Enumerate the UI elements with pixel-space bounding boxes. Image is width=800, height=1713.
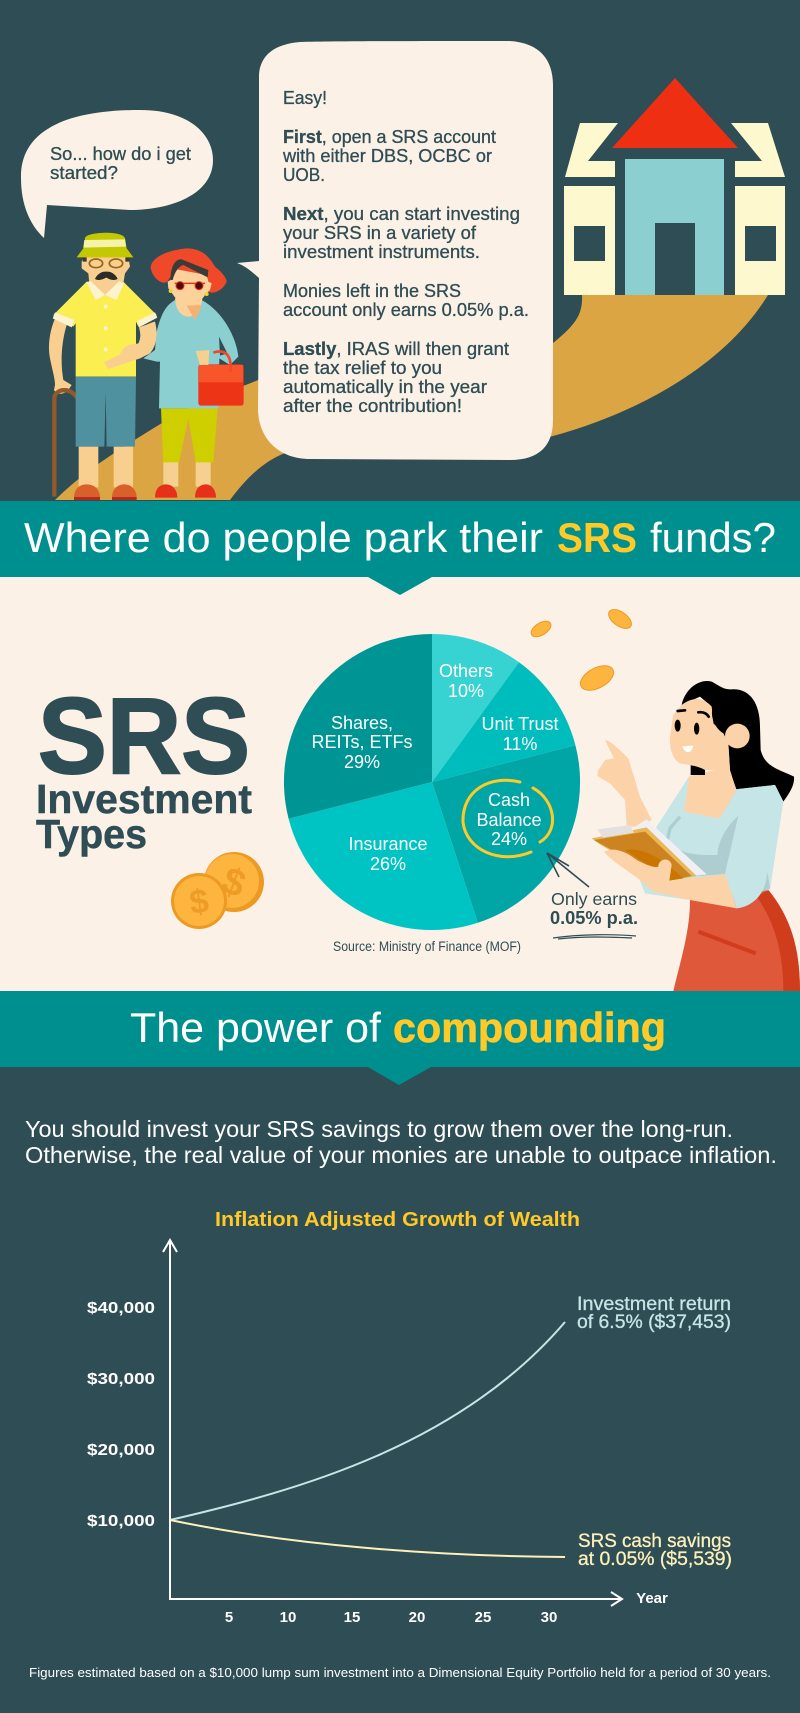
x axis labels: 20	[409, 1609, 425, 1626]
y axis labels	[87, 1300, 155, 1530]
answer text	[282, 87, 529, 416]
speech bubble: answer	[237, 41, 553, 460]
pie labels: 10%	[448, 681, 484, 701]
pie labels: Unit Trust	[481, 714, 559, 734]
callout: only earns: 0.05% p.a.	[550, 908, 638, 928]
illustration: elderly man	[49, 233, 157, 500]
axes	[163, 1240, 622, 1606]
y axis labels: $30,000	[87, 1371, 155, 1388]
answer text: Easy!	[283, 87, 327, 108]
pie labels: 26%	[370, 854, 406, 874]
intro text	[25, 1116, 777, 1168]
y axis labels: $10,000	[87, 1513, 155, 1530]
callout: only earns	[547, 853, 638, 939]
line chart: inflation adjusted growth of wealth	[87, 1209, 732, 1626]
chart title: Inflation Adjusted Growth of Wealth	[215, 1209, 580, 1231]
pie labels	[311, 661, 559, 874]
pie labels: 24%	[491, 829, 527, 849]
pie labels: 11%	[503, 734, 537, 754]
banner heading: Where do people park their	[24, 514, 543, 561]
pie labels: Insurance	[348, 834, 428, 854]
intro text: Otherwise, the real value of your monies are unable to outpace inflation.	[25, 1142, 777, 1168]
panel: power of compounding banner	[0, 991, 800, 1085]
pie labels: REITs, ETFs	[311, 732, 413, 752]
investment return label: of 6.5% ($37,453)	[577, 1312, 731, 1333]
y axis labels: $40,000	[87, 1300, 155, 1317]
title block	[36, 675, 252, 857]
cash savings label	[578, 1531, 732, 1570]
illustration: woman with book	[592, 681, 800, 991]
banner heading: The power of	[130, 1004, 381, 1051]
answer text: with either DBS, OCBC or	[282, 145, 492, 166]
answer text: Next, you can start investing	[283, 203, 520, 224]
banner band	[0, 991, 800, 1085]
x axis labels: 10	[280, 1609, 296, 1626]
pie labels: Shares,	[331, 713, 393, 733]
banner heading: funds?	[650, 514, 776, 561]
cream background	[0, 577, 800, 991]
x axis labels: 25	[475, 1609, 491, 1626]
answer text: Monies left in the SRS	[283, 280, 461, 301]
cash savings label: SRS cash savings	[578, 1531, 731, 1552]
banner band	[0, 501, 800, 595]
x axis labels: 30	[541, 1609, 557, 1626]
cash highlight ring	[463, 780, 553, 857]
investment return label	[577, 1294, 731, 1333]
question text	[50, 143, 191, 183]
x axis labels	[225, 1590, 668, 1626]
x axis labels: Year	[636, 1590, 668, 1607]
x axis labels: 5	[225, 1609, 233, 1626]
answer text: First, open a SRS account	[283, 126, 496, 147]
panel: where do people park banner	[0, 501, 800, 595]
cash savings label: at 0.05% ($5,539)	[578, 1549, 732, 1570]
banner heading	[130, 1004, 666, 1051]
panel: SRS investment types	[0, 577, 800, 991]
speech bubble: question	[21, 110, 213, 238]
investment return line	[170, 1322, 565, 1520]
icon: house	[564, 78, 785, 295]
pie labels: Balance	[476, 810, 542, 830]
question text: started?	[50, 162, 118, 183]
question text: So... how do i get	[50, 143, 191, 164]
answer text: Lastly, IRAS will then grant	[283, 338, 509, 359]
answer text: after the contribution!	[283, 395, 462, 416]
pie labels: Cash	[488, 790, 530, 810]
answer text: automatically in the year	[283, 376, 487, 397]
source note: Source: Ministry of Finance (MOF)	[333, 939, 521, 954]
panel: getting started scene	[21, 41, 785, 500]
pie labels: Others	[439, 661, 493, 681]
icon: coins: $	[187, 882, 211, 922]
answer text: the tax relief to you	[283, 357, 442, 378]
icon: coins: $	[217, 860, 251, 906]
arrow	[547, 853, 589, 887]
illustration: elderly woman	[143, 248, 244, 498]
intro text: You should invest your SRS savings to grow them over the long-run.	[25, 1116, 733, 1142]
pie labels: 29%	[344, 752, 380, 772]
icon: coins	[171, 852, 264, 929]
title block: Types	[36, 811, 147, 857]
banner heading	[24, 514, 776, 561]
answer text: UOB.	[283, 164, 325, 185]
icon: falling coins	[528, 606, 635, 695]
cash savings line	[170, 1520, 565, 1557]
y axis labels: $20,000	[87, 1442, 155, 1459]
title block: Investment	[36, 776, 252, 822]
x axis labels: 15	[344, 1609, 360, 1626]
title block: SRS	[38, 675, 250, 796]
callout: only earns: Only earns	[551, 889, 637, 909]
pie chart	[284, 634, 580, 930]
answer text: investment instruments.	[283, 241, 480, 262]
banner heading: compounding	[393, 1004, 666, 1051]
banner heading: SRS	[557, 514, 637, 561]
footnote: Figures estimated based on a $10,000 lump sum investment into a Dimensional Equity Portfolio held for a period of 30 years.	[29, 1665, 771, 1680]
road	[55, 295, 768, 500]
answer text: your SRS in a variety of	[283, 222, 477, 243]
answer text: account only earns 0.05% p.a.	[283, 299, 529, 320]
investment return label: Investment return	[577, 1294, 731, 1315]
